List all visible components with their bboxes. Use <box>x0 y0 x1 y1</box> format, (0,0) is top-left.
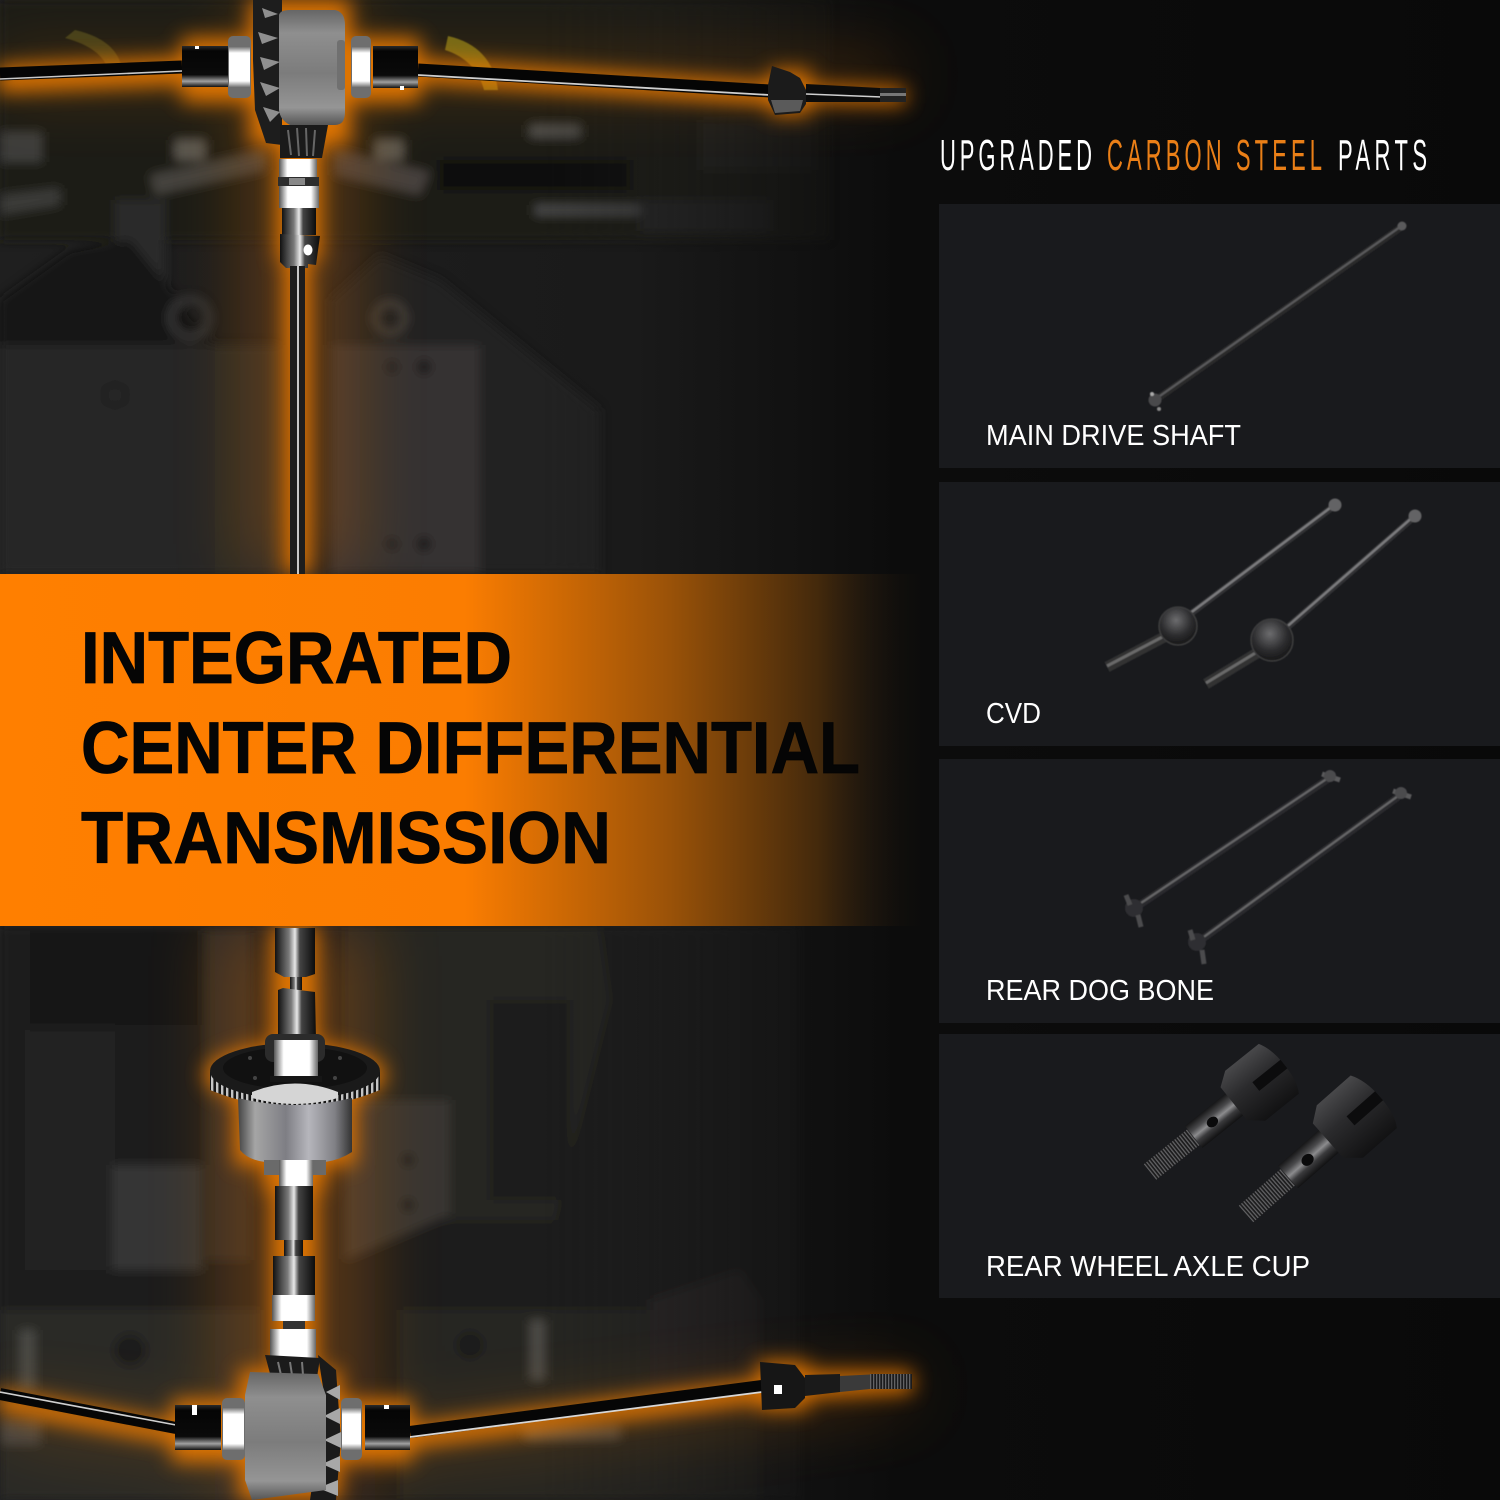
rear pinion <box>265 1355 320 1392</box>
lower shaft <box>273 1186 315 1296</box>
right axle shaft with CVD cup <box>418 66 906 115</box>
parts title <box>940 132 1427 180</box>
rear left axle <box>0 1392 176 1428</box>
parts title: UPGRADED <box>940 132 1092 180</box>
parts title: PARTS <box>1338 132 1427 180</box>
right nut <box>351 36 371 98</box>
part: axle cups <box>1130 1039 1403 1240</box>
pinion gear <box>280 125 328 158</box>
differential case <box>238 1084 352 1162</box>
right cup <box>373 46 418 90</box>
axle highlights (yellow reflections) <box>65 30 498 90</box>
part: main drive shaft <box>1148 222 1406 411</box>
rear right axle with cup <box>410 1362 912 1437</box>
spur gear <box>210 1043 380 1108</box>
part: CVD pair <box>1107 498 1422 684</box>
lower collars <box>270 1295 316 1359</box>
rear housing <box>245 1372 326 1500</box>
part: dog bones <box>1125 770 1411 964</box>
label: REAR DOG BONE <box>986 975 1214 1007</box>
panel: rear wheel axle cup <box>939 1034 1500 1298</box>
wide ambient glow <box>0 0 912 1500</box>
panel: CVD <box>939 482 1500 746</box>
rear left cup <box>175 1405 221 1450</box>
left nut <box>228 36 251 98</box>
center shaft top <box>290 266 305 574</box>
top differential assembly <box>0 0 906 574</box>
top drivetrain glow <box>0 0 905 574</box>
heading <box>81 618 860 879</box>
white collars and fork <box>278 159 320 268</box>
left axle shaft <box>0 67 182 79</box>
ghosted chassis photo <box>0 0 830 1500</box>
panel: main drive shaft <box>939 204 1500 468</box>
rear right nut <box>341 1398 362 1460</box>
label: MAIN DRIVE SHAFT <box>986 420 1241 452</box>
top nut <box>265 1034 325 1082</box>
heading: CENTER DIFFERENTIAL <box>81 708 860 789</box>
label: CVD <box>986 698 1041 730</box>
bottom differential assembly <box>0 928 912 1500</box>
second axle cup <box>1223 1070 1403 1240</box>
left cup <box>182 46 228 87</box>
orange banner <box>0 574 930 926</box>
panel: rear dog bone <box>939 759 1500 1023</box>
lower collar <box>264 1160 326 1186</box>
first axle cup <box>1130 1039 1304 1197</box>
rear right cup <box>365 1405 410 1450</box>
label: REAR WHEEL AXLE CUP <box>986 1251 1310 1283</box>
bottom drivetrain glow <box>0 926 912 1500</box>
heading: TRANSMISSION <box>81 798 611 879</box>
parts title: CARBON STEEL <box>1107 132 1322 180</box>
heading: INTEGRATED <box>81 618 512 699</box>
rear ring gear <box>310 1355 341 1500</box>
rear left nut <box>222 1398 245 1460</box>
upper socket <box>275 928 316 1040</box>
differential housing <box>279 10 345 125</box>
ring gear <box>253 0 282 145</box>
